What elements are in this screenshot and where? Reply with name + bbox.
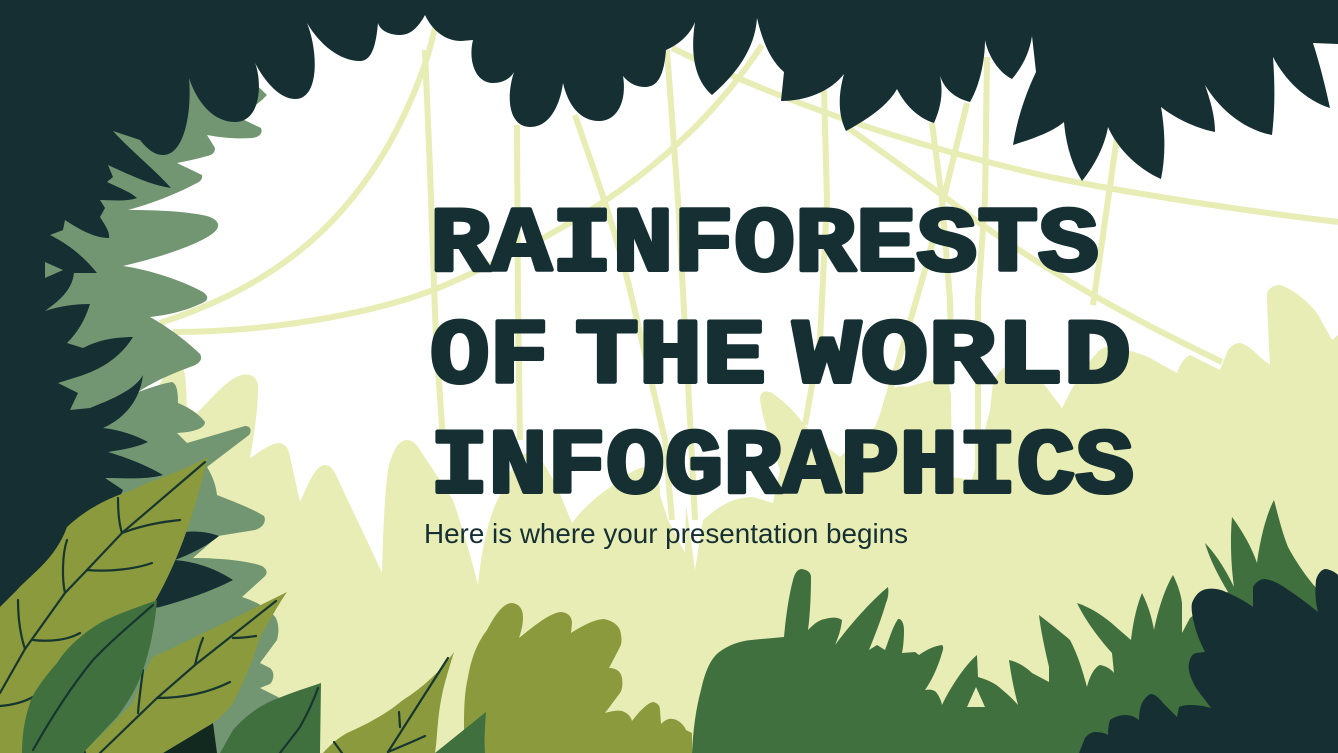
title: THE — [575, 305, 766, 410]
lower dark leaves behind the olive leaf — [102, 532, 233, 618]
sage sliver in dark foliage — [45, 262, 63, 278]
dark wedge under olive leaf — [163, 723, 217, 753]
olive leaf, second — [83, 592, 287, 753]
green leaf bush — [692, 500, 1338, 753]
olive bush — [464, 603, 692, 753]
green leaf, left — [22, 600, 157, 753]
title: INFOGRAPHICS — [430, 415, 1134, 520]
title: RAINFORESTS — [430, 193, 1099, 298]
dark foliage down the left side — [0, 0, 425, 680]
olive leaf, small — [323, 652, 454, 753]
olive leaf, large — [0, 457, 208, 753]
title: WORLD — [793, 305, 1131, 410]
small pale gap in green bush — [967, 687, 985, 707]
green leaf, centre — [220, 683, 321, 753]
subtitle: Here is where your presentation begins — [424, 518, 908, 549]
sage leaf cluster on the left — [0, 60, 282, 753]
dark canopy across the top — [425, 0, 1338, 181]
title: OF — [430, 305, 549, 410]
title — [430, 193, 1134, 520]
hanging jungle vines — [160, 20, 1338, 520]
green leaf tip — [435, 712, 486, 753]
dark bush bottom right — [1079, 569, 1338, 753]
pale background foliage — [150, 285, 1338, 753]
